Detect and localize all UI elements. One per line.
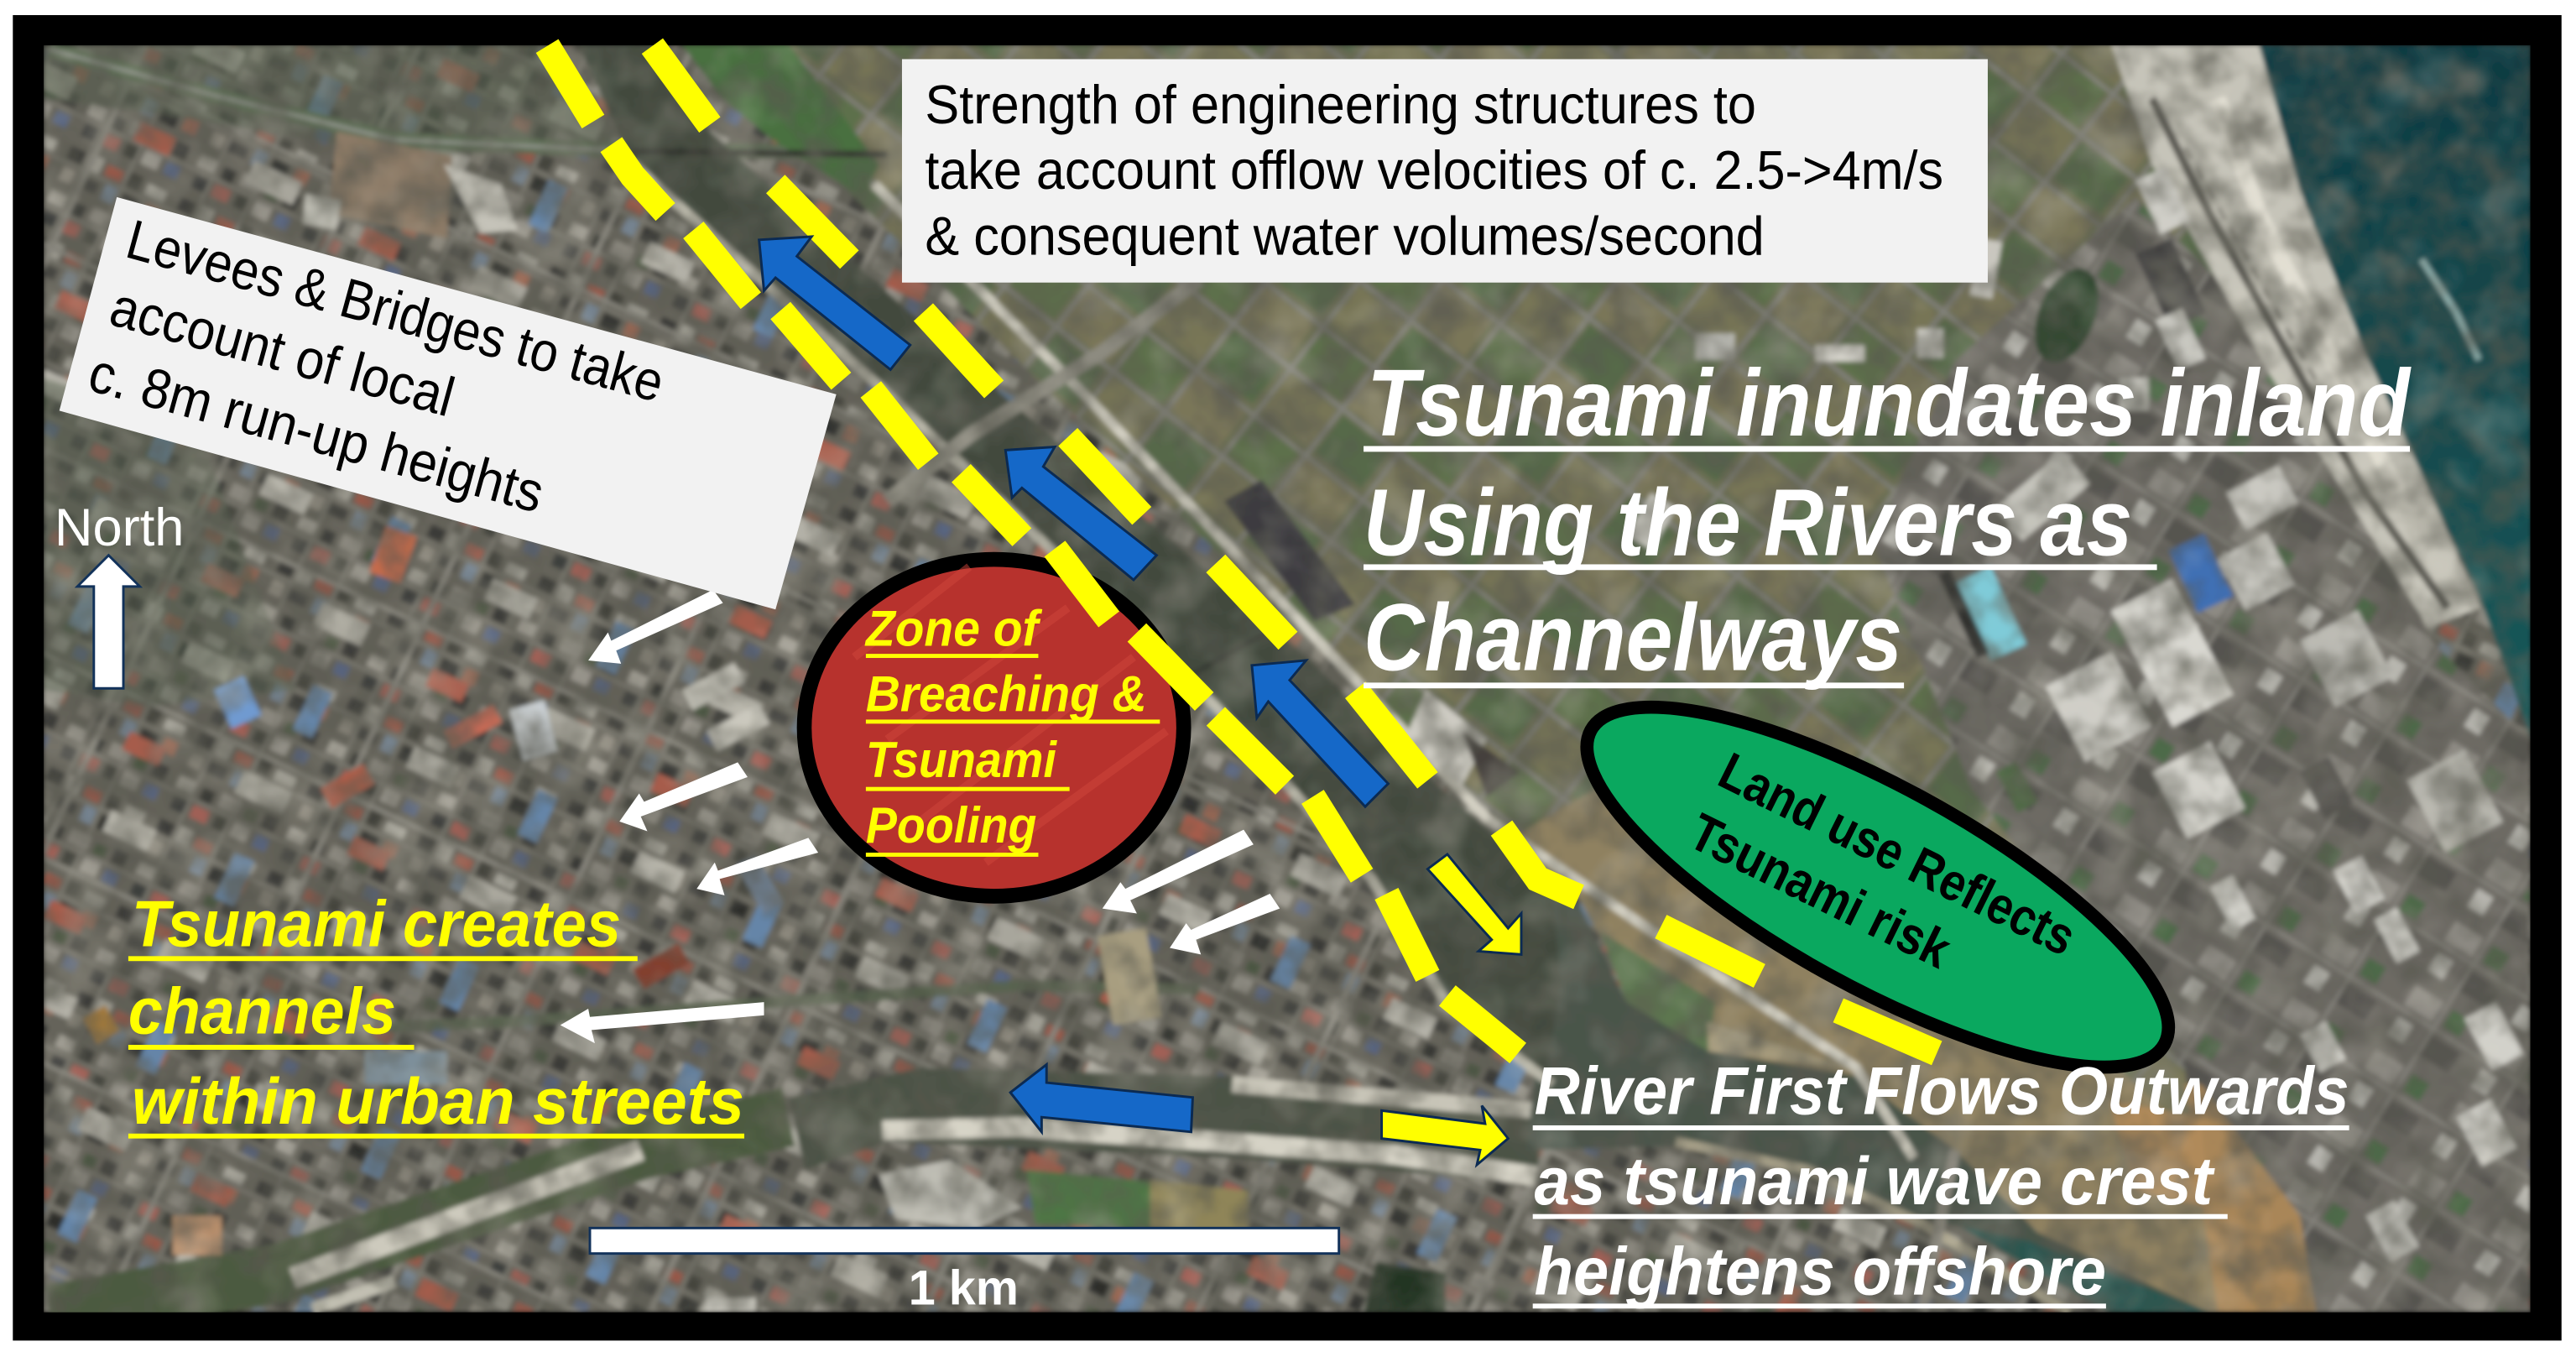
callout: strength of engineering structures: take account offlow velocities of c. 2.5->4m/s [925, 140, 1943, 201]
yellow outflow arrow 1 [1427, 854, 1521, 954]
callout: levees and bridges: Levees & Bridges to take [120, 208, 670, 415]
title: tsunami inundates inland: Tsunami inundates inland [1367, 350, 2412, 457]
label: river first flows outwards: heightens offshore [1535, 1234, 2106, 1310]
label: zone of breaching and pooling [864, 599, 1160, 857]
callout: strength of engineering structures: & consequent water volumes/second [925, 206, 1765, 266]
seaside port strip [2111, 44, 2480, 628]
greener northwest district [43, 44, 624, 156]
urban landmark buildings [82, 525, 1161, 1255]
green urban channel and lower river [50, 1117, 789, 1314]
red zone: breaching and tsunami pooling [804, 560, 1184, 896]
title: tsunami inundates inland [1364, 350, 2412, 692]
green east bank [682, 44, 879, 197]
field buildings [1626, 164, 2206, 551]
blue inflow arrow 2 [1005, 446, 1156, 580]
blue inflow arrow 4 [1010, 1065, 1192, 1132]
label: land use reflects tsunami risk: Land use Reflects [1710, 742, 2084, 968]
mid buildings under title [1626, 493, 1676, 551]
apartment block by river [1224, 480, 1355, 621]
label: zone of breaching and pooling: Tsunami [866, 731, 1057, 788]
scale bar [590, 1228, 1339, 1315]
eastern fields [791, 45, 2209, 1115]
label: tsunami creates channels: within urban streets [132, 1064, 744, 1138]
parking lot and white warehouse [329, 132, 452, 238]
rail and road corridor [50, 50, 920, 151]
north arrow: North [55, 498, 184, 557]
label: tsunami creates channels: Tsunami creates [132, 887, 621, 961]
scale bar: 1 km [909, 1260, 1019, 1315]
industrial buildings [1938, 451, 2524, 1262]
white flow arrows through streets [561, 590, 1280, 1043]
blue inflow arrow 3 [1252, 660, 1388, 806]
yellow outflow arrow 2 [1382, 1105, 1508, 1165]
label: tsunami creates channels: channels [128, 973, 396, 1047]
label: land use reflects tsunami risk: Tsunami risk [1681, 802, 1960, 980]
yellow dashed flood limits: west bank [547, 46, 1518, 1053]
industrial district [1873, 197, 2530, 1313]
label: zone of breaching and pooling: Breaching & [866, 665, 1147, 723]
estuary [1362, 822, 2209, 1313]
blue inflow arrow 1 [759, 237, 910, 369]
main river [578, 44, 1561, 1084]
callout: levees and bridges [60, 197, 837, 609]
yellow dashed flood limits: east bank [652, 46, 1937, 1053]
south building and fields [879, 1160, 1022, 1229]
north arrow [55, 498, 184, 688]
label: zone of breaching and pooling: Zone of [864, 599, 1043, 656]
green zone: land use [1543, 642, 2213, 1132]
label: tsunami creates channels [128, 887, 744, 1139]
callout: levees and bridges: account of local [104, 276, 461, 429]
tan flood land [1524, 788, 2217, 1313]
open sea [2259, 44, 2532, 739]
callout: strength of engineering structures [902, 59, 1988, 283]
callout: levees and bridges: c. 8m run-up heights [82, 342, 550, 525]
callout: strength of engineering structures: Strength of engineering structures to [925, 75, 1756, 135]
label: river first flows outwards [1533, 1053, 2349, 1310]
title: tsunami inundates inland: Channelways [1364, 585, 1902, 692]
title: tsunami inundates inland: Using the Rivers as [1364, 470, 2132, 577]
label: river first flows outwards: as tsunami wave crest [1535, 1144, 2215, 1219]
bridges [887, 279, 1199, 501]
label: zone of breaching and pooling: Pooling [866, 796, 1036, 853]
label: river first flows outwards: River First Flows Outwards [1535, 1053, 2349, 1129]
